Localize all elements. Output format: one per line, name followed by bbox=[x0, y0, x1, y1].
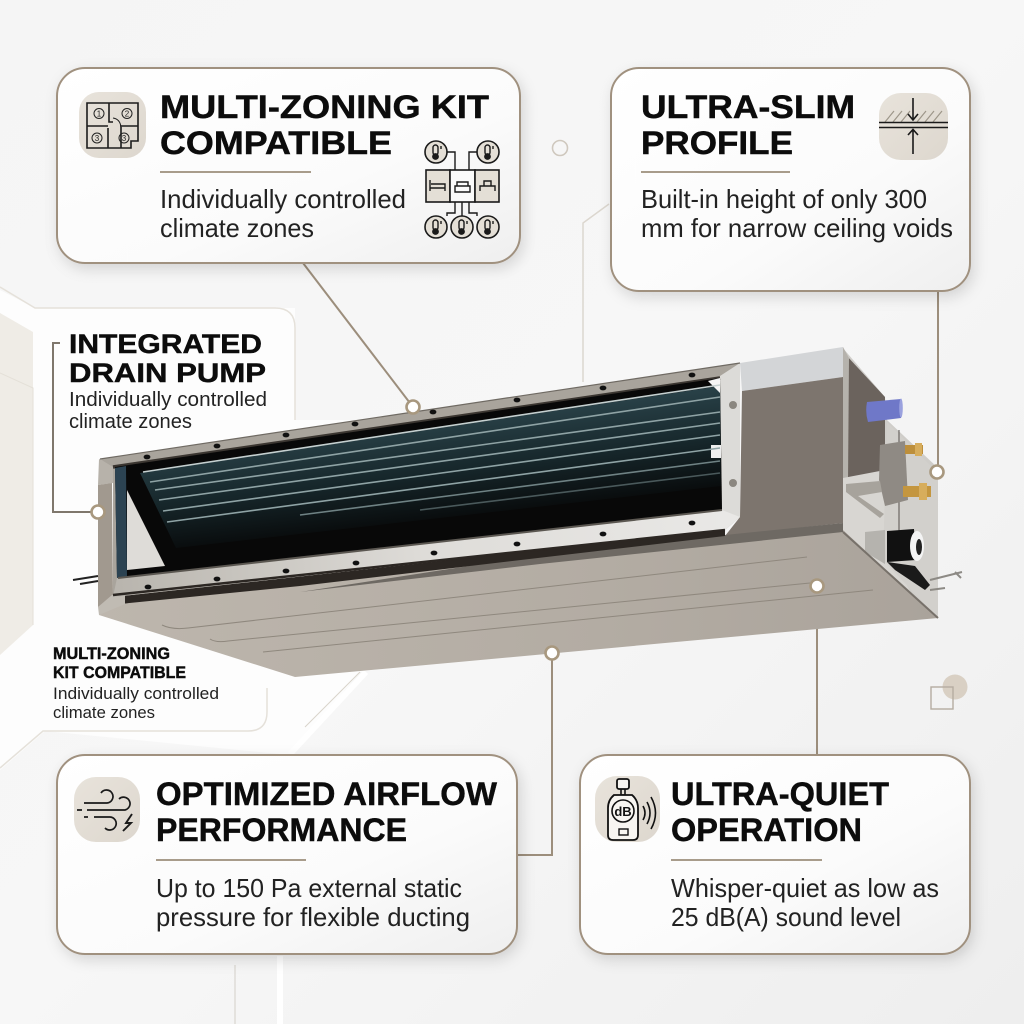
icon: zone thermostats diagram bbox=[425, 141, 499, 238]
icon: floor plan zones: 3 bbox=[95, 134, 100, 143]
description: Whisper-quiet as low as bbox=[671, 873, 939, 903]
callout: small multi-zoning note: KIT COMPATIBLE bbox=[53, 664, 186, 682]
icon: height limit arrows bbox=[879, 93, 948, 160]
icon: floor plan zones bbox=[79, 92, 146, 158]
bottom panel bbox=[99, 530, 938, 677]
product: ducted air conditioning unit bbox=[73, 347, 962, 677]
icon: floor plan zones: 3 bbox=[122, 134, 127, 143]
callout: integrated drain pump bbox=[69, 329, 267, 433]
callout: integrated drain pump: Individually controlled bbox=[69, 389, 267, 411]
icon: floor plan zones: 1 bbox=[97, 110, 102, 118]
description bbox=[641, 184, 953, 243]
heading bbox=[156, 776, 498, 848]
heading: COMPATIBLE bbox=[160, 125, 392, 161]
callout: integrated drain pump: DRAIN PUMP bbox=[69, 358, 266, 388]
panel: multi-zoning kit compatible bbox=[57, 68, 520, 263]
description bbox=[156, 873, 470, 932]
black control box bbox=[865, 529, 930, 590]
heading: PROFILE bbox=[641, 125, 793, 161]
blue tube bbox=[866, 398, 903, 422]
description: Up to 150 Pa external static bbox=[156, 873, 462, 903]
heading: ULTRA-SLIM bbox=[641, 89, 855, 125]
callout: integrated drain pump: climate zones bbox=[69, 411, 192, 433]
description: mm for narrow ceiling voids bbox=[641, 213, 953, 243]
left mounting bracket bbox=[73, 576, 98, 584]
panel: ultra-slim profile bbox=[611, 68, 970, 291]
panel: ultra-quiet operation bbox=[580, 755, 970, 954]
panel: optimized airflow performance bbox=[57, 755, 517, 954]
callout: integrated drain pump: INTEGRATED bbox=[69, 329, 262, 359]
description: 25 dB(A) sound level bbox=[671, 902, 901, 932]
description bbox=[671, 873, 939, 932]
description: Built-in height of only 300 bbox=[641, 184, 927, 214]
air inlet opening and coil bbox=[115, 378, 722, 578]
mounting holes bbox=[144, 373, 695, 589]
icon: floor plan zones: 2 bbox=[125, 110, 130, 118]
coil fins bbox=[143, 385, 720, 522]
insulation strip bbox=[300, 523, 843, 592]
heading: PERFORMANCE bbox=[156, 812, 407, 848]
icon: decibel meter: dB bbox=[614, 804, 632, 819]
heading bbox=[671, 776, 889, 848]
callout: small multi-zoning note: MULTI-ZONING bbox=[53, 645, 170, 663]
description: Individually controlled bbox=[160, 184, 406, 214]
description bbox=[160, 184, 406, 243]
dark strip under frame bbox=[118, 530, 725, 604]
icon: decibel meter bbox=[595, 776, 660, 842]
description: pressure for flexible ducting bbox=[156, 902, 470, 932]
heading: ULTRA-QUIET bbox=[671, 776, 889, 812]
callout: small multi-zoning note: climate zones bbox=[53, 703, 155, 722]
connector lines bbox=[53, 263, 938, 855]
heading: OPTIMIZED AIRFLOW bbox=[156, 776, 498, 812]
callout: small multi-zoning note bbox=[53, 645, 219, 722]
heading: OPERATION bbox=[671, 812, 862, 848]
heading bbox=[641, 89, 855, 161]
front frame flange bbox=[100, 363, 740, 597]
silver top strip and grey side panel bbox=[725, 347, 843, 536]
description: climate zones bbox=[160, 213, 314, 243]
callout: small multi-zoning note: Individually controlled bbox=[53, 684, 219, 703]
brackets and fittings bbox=[846, 441, 931, 518]
icon: airflow wind bbox=[74, 777, 140, 842]
left end tab bbox=[98, 459, 125, 615]
right end plate bbox=[842, 347, 962, 618]
connector end dots bbox=[92, 400, 944, 660]
heading: MULTI-ZONING KIT bbox=[160, 89, 490, 125]
heading bbox=[160, 89, 490, 161]
